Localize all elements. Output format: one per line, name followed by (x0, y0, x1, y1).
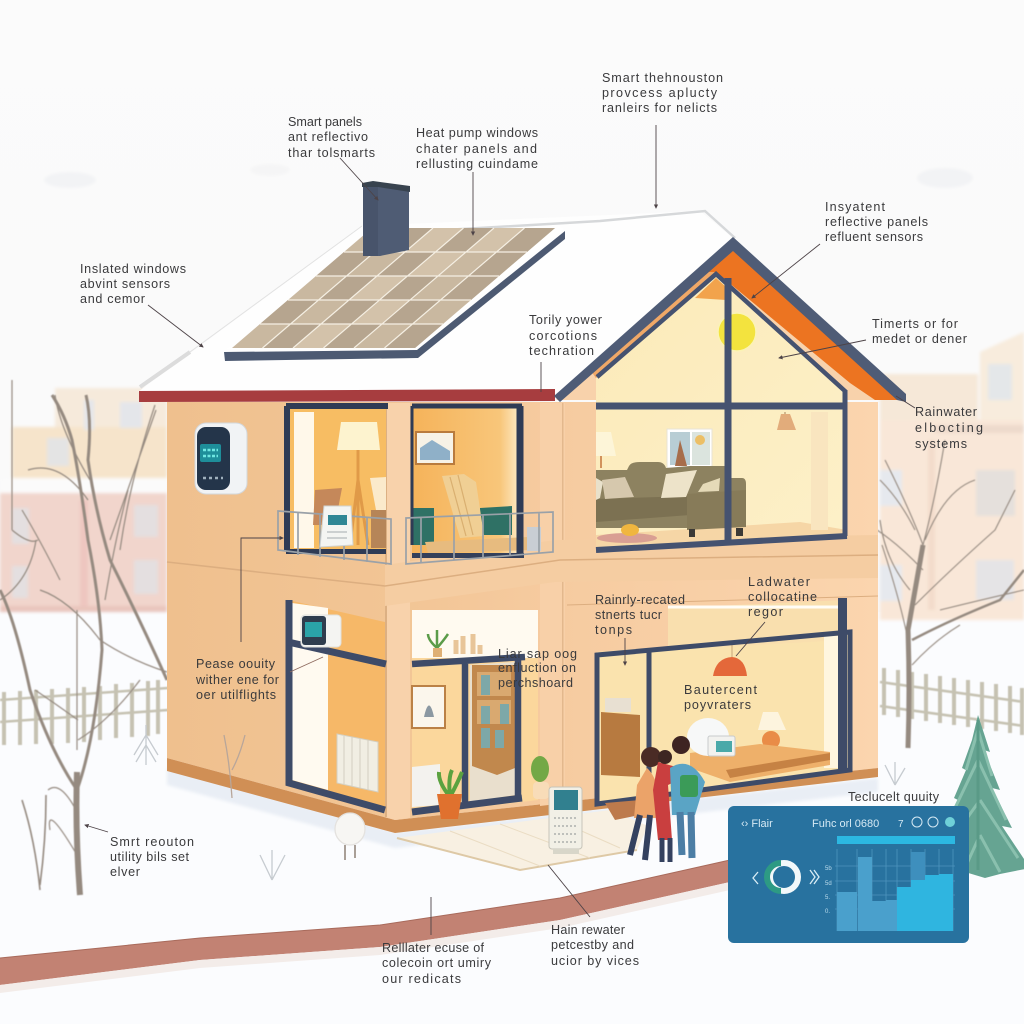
bare tree, right (860, 440, 1024, 748)
upper-left window (286, 406, 388, 554)
callout: utility bills (85, 825, 194, 879)
dashboard header: Fuhc orl 0680 (812, 818, 879, 830)
chart axis labels: 5. (825, 895, 830, 901)
callout: rellater (382, 897, 492, 986)
callout: please quality (195, 538, 323, 702)
plant on shelf (428, 630, 480, 657)
callout: heat pump: rellusting cuindame (416, 157, 538, 171)
callout: reflective panels: reflective panels (825, 215, 928, 229)
potted plant (437, 770, 462, 819)
callout: power corrections: corcotions (529, 329, 597, 343)
callout: bautercent: poyvraters (684, 698, 751, 712)
gable glass (596, 272, 847, 548)
background buildings, right (880, 332, 1024, 620)
callout: smart thermostat: provcess aplucty (602, 86, 718, 100)
callout: power corrections (529, 313, 602, 392)
callout: power corrections: techration (529, 344, 594, 358)
chart axis labels: 0. (825, 909, 830, 915)
sun disc (718, 313, 756, 351)
kiosk (549, 787, 582, 854)
callout: smart panels (288, 115, 378, 200)
low table (690, 744, 830, 782)
gable window frame (596, 274, 847, 550)
callout: please quality: oer utilflights (196, 688, 276, 702)
callout: rellater: colecoin ort umiry (382, 956, 492, 970)
chart axis labels: 5d (825, 881, 832, 887)
lounge chair (442, 474, 484, 538)
callout: timers: medet or dener (872, 332, 967, 346)
callout: smart panels: Smart panels (288, 115, 362, 129)
pendant lamp (713, 645, 747, 676)
callout: reflective panels: refluent sensors (825, 230, 923, 244)
callout: rellater: our redicats (382, 972, 461, 986)
callouts (80, 71, 983, 986)
sofa (596, 462, 746, 528)
callout: reflective panels (752, 200, 928, 298)
lower-left window (288, 600, 386, 810)
callout: please quality: Pease oouity (196, 657, 276, 671)
callout: rainwater systems: elbocting (915, 421, 983, 435)
radiator (337, 734, 378, 792)
callout: heat pump: chater panels and (416, 142, 537, 156)
callout: insulated windows: Inslated windows (80, 262, 186, 276)
adult right (670, 764, 705, 815)
callout: utility bills: utility bils set (110, 850, 190, 864)
callout: rainfly: stnerts tucr (595, 608, 662, 622)
callout: heat pump (416, 126, 538, 235)
solar panel (224, 226, 565, 361)
eave band (139, 389, 555, 402)
fence, right (880, 668, 1024, 735)
smart thermostat on wall (195, 423, 247, 494)
bookshelf (472, 665, 515, 775)
callout: enfluction: enfluction on (498, 661, 576, 675)
framed bell picture (412, 686, 445, 728)
callout: dashboard title: Teclucelt quuity (848, 790, 940, 804)
house (138, 181, 906, 848)
callout: smart thermostat: Smart thehnouston (602, 71, 723, 85)
chimney (362, 181, 410, 256)
dashboard panel (728, 806, 969, 943)
dashboard header (741, 817, 955, 830)
callout: rainfly: tonps (595, 623, 632, 637)
adult left (634, 768, 660, 818)
callout: reflective panels: Insyatent (825, 200, 886, 214)
callout: rainwater systems: systems (915, 437, 967, 451)
callout: ladwater: collocatine (748, 590, 817, 604)
callout: rainwater systems: Rainwater (915, 405, 977, 419)
roof plane in snow (138, 211, 735, 394)
callout: hain rewater: petcestby and (551, 938, 634, 952)
callout: enfluction: Liar sap oog (498, 647, 577, 661)
roof (138, 181, 735, 402)
callout: hain rewater (548, 865, 639, 968)
callout: rainfly: Rainrly-recated (595, 593, 685, 607)
callout: smart panels: ant reflectivo (288, 130, 368, 144)
callout: utility bills: Smrt reouton (110, 835, 194, 849)
road wall (0, 860, 730, 993)
callout: heat pump: Heat pump windows (416, 126, 538, 140)
callout: rellater: Relllater ecuse of (382, 941, 484, 955)
callout: rainwater systems (896, 396, 983, 451)
family group (630, 736, 705, 862)
living room upper right (596, 412, 847, 548)
callout: bautercent: Bautercent (684, 683, 758, 697)
dashboard header: 7 (898, 819, 904, 830)
callout: rainfly (595, 593, 685, 665)
lower-right large window (597, 598, 850, 804)
floor lamp (337, 422, 380, 450)
terrace (397, 800, 648, 870)
callout: ladwater: Ladwater (748, 575, 810, 589)
callout: enfluction: perchshoard (498, 676, 573, 690)
walls (167, 402, 878, 820)
dashboard header: ‹› Flair (741, 818, 773, 830)
callout: insulated windows: abvint sensors (80, 277, 170, 291)
bare tree, far left (0, 380, 167, 895)
callout: ladwater (736, 575, 817, 656)
evergreen tree (942, 715, 1024, 878)
table lamp (758, 712, 786, 749)
callout: ladwater: regor (748, 605, 783, 619)
cabinet (601, 698, 640, 777)
callout: hain rewater: Hain rewater (551, 923, 625, 937)
callout: smart panels: thar tolsmarts (288, 146, 375, 160)
background buildings, left (0, 388, 167, 612)
callout: bautercent (684, 683, 758, 712)
callout: insulated windows: and cemor (80, 292, 145, 306)
small snowy shrubs and saplings (134, 725, 905, 880)
callout: power corrections: Torily yower (529, 313, 602, 327)
callout: insulated windows (80, 262, 203, 347)
framed picture (416, 432, 454, 464)
chart axis labels: 5b (825, 866, 832, 872)
callout: timers: Timerts or for (872, 317, 958, 331)
lamp and art (596, 432, 616, 456)
callout: timers (779, 317, 967, 358)
callout: hain rewater: ucior by vices (551, 954, 639, 968)
callout: smart thermostat: ranleirs for nelicts (602, 101, 717, 115)
callout: please quality: wither ene for (195, 673, 279, 687)
gable (554, 237, 906, 548)
donut gauge (753, 863, 819, 891)
shrub (531, 756, 549, 799)
callout: smart thermostat (602, 71, 723, 208)
balcony rails (278, 511, 553, 564)
bar chart (835, 849, 955, 931)
upper-middle window (412, 406, 541, 558)
white chair and tablet (687, 718, 735, 756)
callout: enfluction (498, 647, 577, 690)
callout: utility bills: elver (110, 865, 140, 879)
child in red (653, 762, 695, 840)
device on balcony (320, 506, 353, 547)
fence, left (0, 680, 168, 745)
chart axis labels (825, 866, 832, 915)
snow shadow under house (167, 768, 878, 848)
wall sensor (301, 615, 341, 647)
lower-middle room (412, 610, 549, 819)
